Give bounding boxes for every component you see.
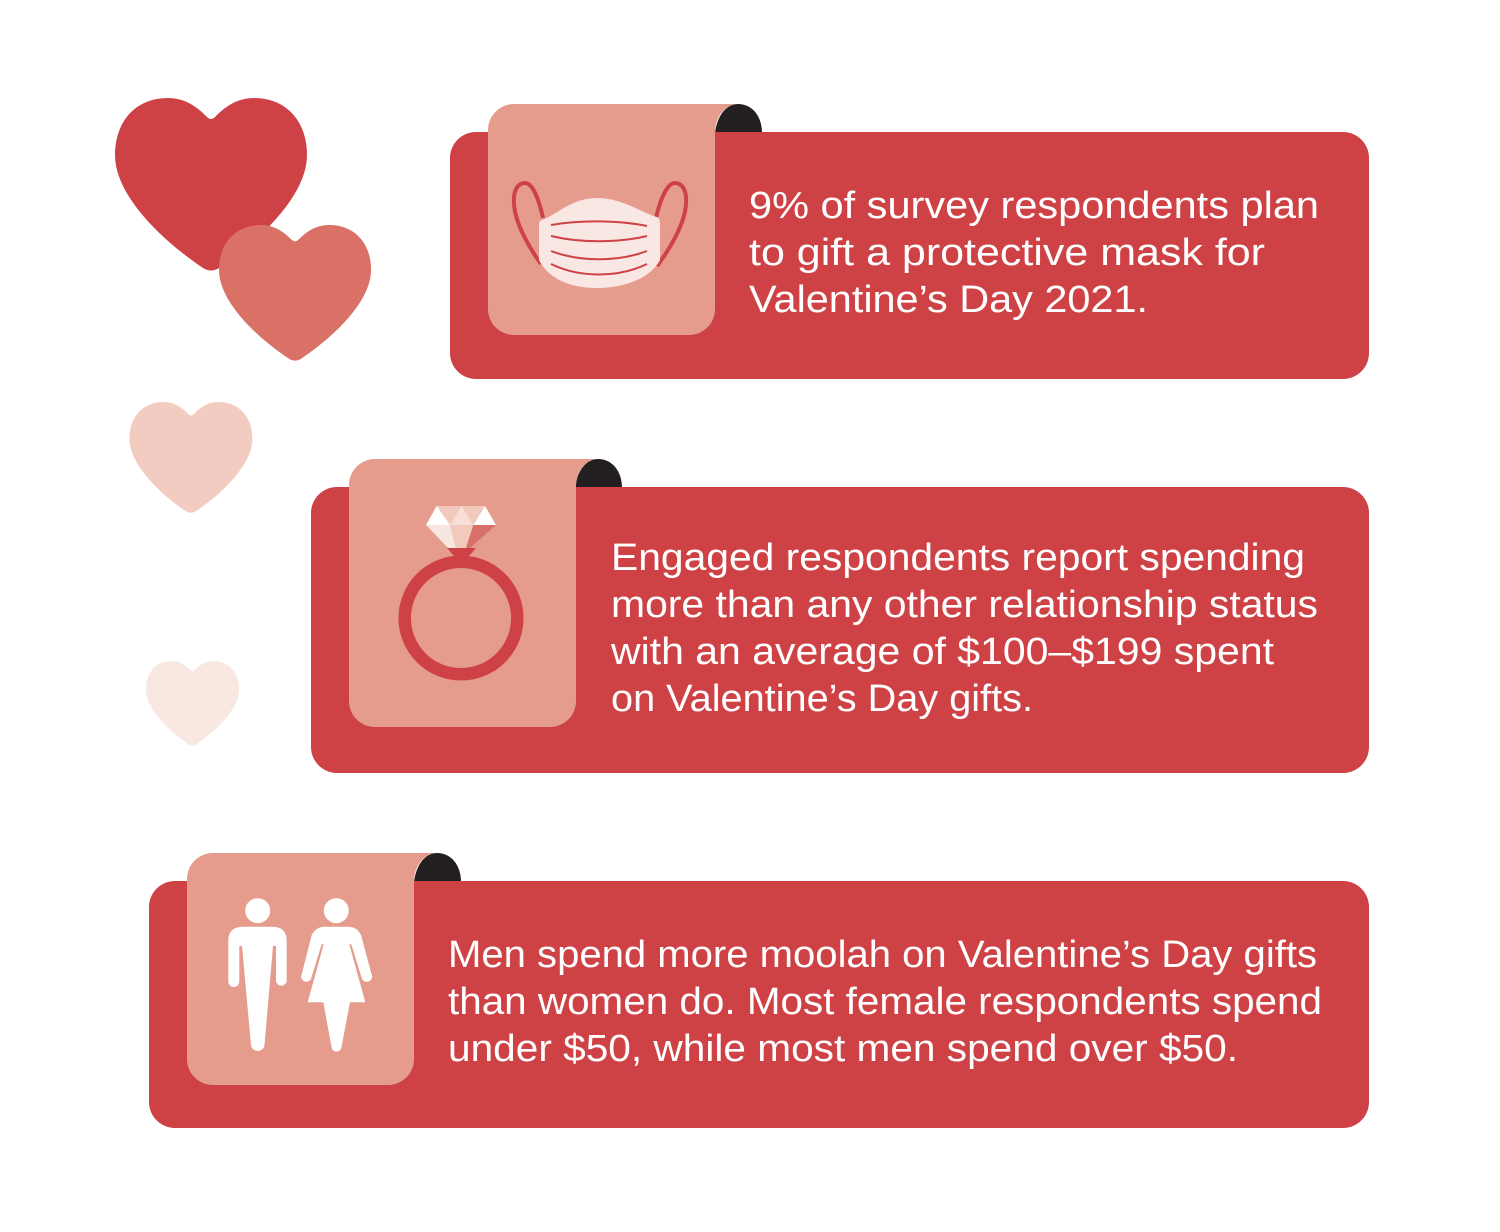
icon tab bbox=[187, 853, 437, 1085]
icon: face mask bbox=[514, 183, 686, 288]
icon: large red heart bbox=[115, 98, 307, 270]
text: engaged statistic: more than any other relationship status bbox=[611, 584, 1318, 626]
text: spending by gender: Men spend more moolah on Valentine’s Day gifts bbox=[448, 934, 1317, 976]
text: mask statistic: Valentine’s Day 2021. bbox=[749, 279, 1148, 321]
text: spending by gender: than women do. Most female respondents spend bbox=[448, 981, 1322, 1023]
text: spending by gender bbox=[448, 934, 1322, 1070]
folded tab shadow bbox=[715, 104, 762, 133]
text: spending by gender: under $50, while most men spend over $50. bbox=[448, 1028, 1238, 1070]
text: engaged statistic: on Valentine’s Day gifts. bbox=[611, 678, 1033, 720]
icon: pale pink heart bbox=[146, 661, 239, 746]
card background bbox=[311, 487, 1369, 773]
icon: man and woman bbox=[228, 898, 372, 1052]
text: mask statistic: 9% of survey respondents plan bbox=[749, 185, 1319, 227]
text: mask statistic: to gift a protective mask for bbox=[749, 232, 1265, 274]
panel: protective mask statistic bbox=[450, 104, 1369, 379]
text: engaged statistic: Engaged respondents report spending bbox=[611, 537, 1305, 579]
icon tab bbox=[488, 104, 738, 335]
icon: medium coral heart bbox=[219, 225, 371, 361]
folded tab shadow bbox=[414, 853, 461, 882]
icon: diamond ring bbox=[405, 506, 517, 674]
text: engaged statistic bbox=[610, 537, 1318, 720]
card background bbox=[149, 881, 1369, 1128]
text: engaged statistic: with an average of $100–$199 spent bbox=[610, 631, 1274, 673]
icon: light pink heart bbox=[130, 402, 252, 513]
panel: engaged respondents statistic bbox=[311, 459, 1369, 773]
folded tab shadow bbox=[575, 459, 622, 488]
card background bbox=[450, 132, 1369, 379]
icon tab bbox=[349, 459, 598, 727]
panel: men versus women statistic bbox=[149, 853, 1369, 1128]
text: mask statistic bbox=[749, 185, 1319, 321]
